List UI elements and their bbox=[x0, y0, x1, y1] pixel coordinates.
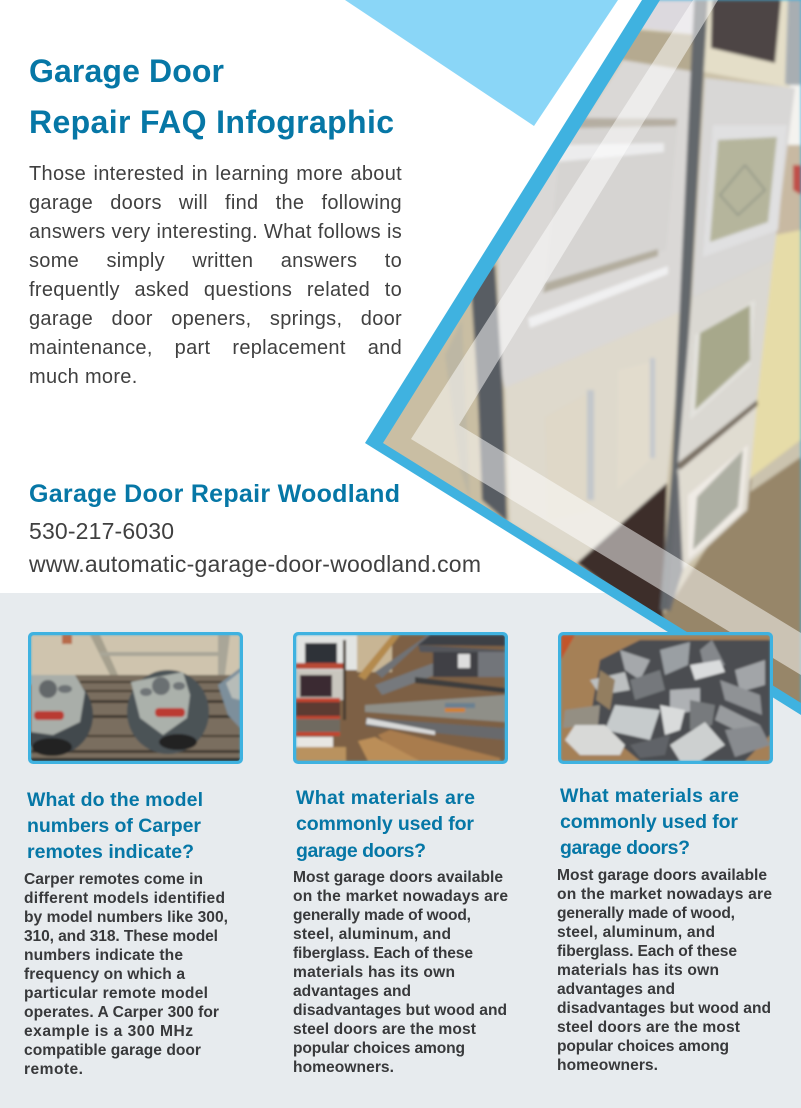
contact block and cards bbox=[24, 484, 773, 1074]
photo: box of metal brackets bbox=[558, 632, 773, 764]
card 2 text: materials has its own bbox=[293, 964, 455, 981]
card 3 text: generally made of wood, bbox=[557, 905, 735, 922]
card 2 text: popular choices among bbox=[293, 1040, 465, 1057]
card 3 heading: What materials are bbox=[560, 785, 739, 807]
card 1 text: example is a 300 MHz bbox=[24, 1023, 193, 1040]
left wall and steel post bbox=[500, 380, 511, 522]
blue chevron band bbox=[365, 0, 801, 715]
card 1 text: remote. bbox=[24, 1061, 83, 1078]
card 1 text: by model numbers like 300, bbox=[24, 909, 228, 926]
contact details: Garage Door Repair Woodland bbox=[29, 480, 400, 508]
intro paragraph: Those interested in learning more about bbox=[29, 163, 402, 185]
card 2 text: on the market nowadays are bbox=[293, 888, 508, 905]
yellow wall and floor bbox=[750, 225, 801, 480]
card 1 heading: What do the model bbox=[27, 789, 203, 811]
right post bbox=[785, 0, 801, 88]
card 3 heading: garage doors? bbox=[560, 837, 690, 859]
card 3 text: steel, aluminum, and bbox=[557, 924, 715, 941]
sign bbox=[711, 0, 781, 63]
card 2: materials bbox=[293, 632, 508, 1076]
card 1 heading: numbers of Carper bbox=[27, 815, 201, 837]
card 2 heading: garage doors? bbox=[296, 840, 426, 862]
card 1 text: particular remote model bbox=[24, 985, 208, 1002]
photo: garage remotes bbox=[17, 632, 243, 764]
card 2 text: steel, aluminum, and bbox=[293, 926, 451, 943]
card 2 text: homeowners. bbox=[293, 1059, 394, 1076]
light blue triangle bbox=[345, 0, 618, 126]
card 1: remotes bbox=[17, 632, 243, 1078]
card 1 heading: remotes indicate? bbox=[27, 841, 194, 863]
intro paragraph: garage door openers, springs, door bbox=[29, 308, 402, 330]
right door panels bbox=[692, 78, 795, 298]
right wall, white top bbox=[786, 83, 801, 147]
card 2 text: generally made of wood, bbox=[293, 907, 471, 924]
card 1 text: 310, and 318. These model bbox=[24, 928, 218, 945]
card 1 text bbox=[24, 871, 228, 1078]
card 2 heading: commonly used for bbox=[296, 813, 474, 835]
card 3 text: on the market nowadays are bbox=[557, 886, 772, 903]
card 2 heading bbox=[296, 787, 475, 862]
card 2 text: fiberglass. Each of these bbox=[293, 945, 473, 962]
card 3 text: materials has its own bbox=[557, 962, 719, 979]
card 3 heading: commonly used for bbox=[560, 811, 738, 833]
intro paragraph bbox=[29, 163, 402, 388]
card 3 text: popular choices among bbox=[557, 1038, 729, 1055]
card 3 text bbox=[557, 867, 772, 1074]
card 1 text: different models identified bbox=[24, 890, 225, 907]
grey lower section background bbox=[0, 593, 801, 1108]
top wall bbox=[642, 0, 790, 88]
contact details: www.automatic-garage-door-woodland.com bbox=[28, 551, 481, 577]
card 2 text bbox=[293, 869, 508, 1076]
card 3 text: disadvantages but wood and bbox=[557, 1000, 771, 1017]
translucent white chevron stripe bbox=[411, 0, 801, 675]
card 3 text: steel doors are the most bbox=[557, 1019, 740, 1036]
photo: warehouse rack bbox=[293, 632, 508, 764]
card 3 text: homeowners. bbox=[557, 1057, 658, 1074]
intro paragraph: some simply written answers to bbox=[29, 250, 402, 272]
card 1 text: operates. A Carper 300 for bbox=[24, 1004, 219, 1021]
large top door panel bbox=[498, 60, 696, 392]
title bbox=[29, 53, 394, 140]
card 1 text: frequency on which a bbox=[24, 966, 185, 983]
card 3 text: Most garage doors available bbox=[557, 867, 767, 884]
title: Garage Door bbox=[29, 53, 224, 89]
card 3 text: fiberglass. Each of these bbox=[557, 943, 737, 960]
card 3 text: advantages and bbox=[557, 981, 675, 998]
card 1 text: compatible garage door bbox=[24, 1042, 201, 1059]
card 2 text: steel doors are the most bbox=[293, 1021, 476, 1038]
card 1 text: numbers indicate the bbox=[24, 947, 183, 964]
intro paragraph: frequently asked questions related to bbox=[29, 279, 402, 301]
card 3: materials bbox=[557, 632, 773, 1074]
card 1 text: Carper remotes come in bbox=[24, 871, 203, 888]
central post bbox=[660, 0, 708, 610]
contact details: 530-217-6030 bbox=[29, 518, 174, 544]
lower left door panel bbox=[500, 310, 684, 563]
card 1 heading bbox=[27, 789, 203, 863]
card 2 heading: What materials are bbox=[296, 787, 475, 809]
card 3 heading bbox=[560, 785, 739, 859]
garage door photo bbox=[360, 0, 801, 720]
intro paragraph: maintenance, part replacement and bbox=[29, 337, 402, 359]
dark area below door bbox=[577, 483, 667, 620]
card 2 text: advantages and bbox=[293, 983, 411, 1000]
intro paragraph: garage doors will find the following bbox=[29, 192, 402, 214]
card 2 text: disadvantages but wood and bbox=[293, 1002, 507, 1019]
intro paragraph: answers very interesting. What follows is bbox=[29, 221, 402, 243]
contact details bbox=[28, 480, 481, 577]
intro paragraph: much more. bbox=[29, 366, 138, 388]
title: Repair FAQ Infographic bbox=[29, 104, 394, 140]
card 2 text: Most garage doors available bbox=[293, 869, 503, 886]
